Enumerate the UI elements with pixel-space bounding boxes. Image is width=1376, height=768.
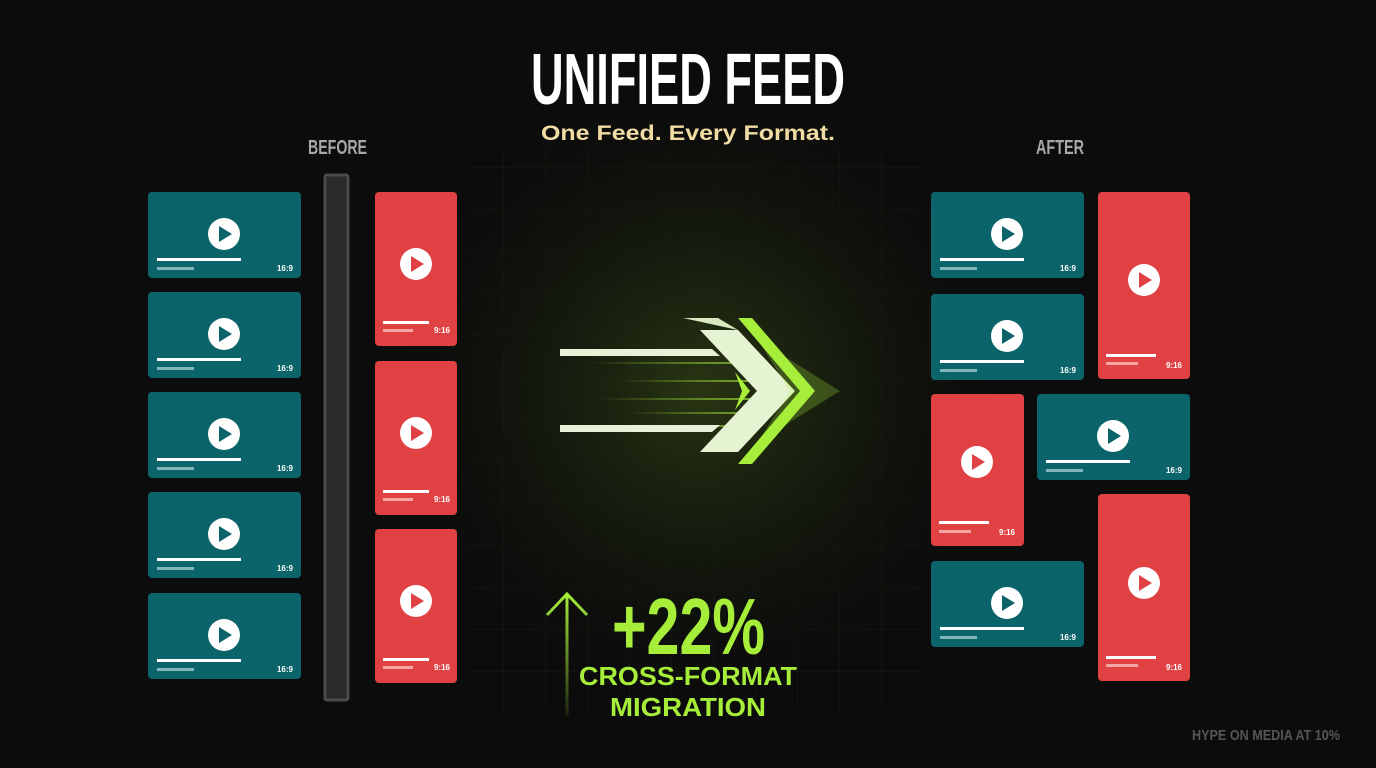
teal card A1 — [931, 192, 1084, 278]
stat: +22% cross-format migration: CROSS-FORMAT — [579, 661, 797, 691]
teal card 5: 16:9 — [277, 665, 294, 674]
arrow: transformation chevrons — [560, 318, 840, 464]
stat: +22% cross-format migration: +22% — [612, 582, 765, 671]
teal card 4 — [148, 492, 301, 578]
teal card A3: 16:9 — [1166, 466, 1183, 475]
red card A3: 9:16 — [1166, 663, 1183, 672]
stat: +22% cross-format migration: MIGRATION — [610, 692, 766, 722]
teal card A2 — [931, 294, 1084, 380]
label: after: AFTER — [1036, 137, 1084, 159]
red card A3 — [1098, 494, 1190, 681]
teal card 3: 16:9 — [277, 464, 294, 473]
teal card 1: 16:9 — [277, 264, 294, 273]
red card 3 — [375, 529, 457, 683]
red card A2: 9:16 — [999, 528, 1016, 537]
teal card A1: 16:9 — [1060, 264, 1077, 273]
red card 1: 9:16 — [434, 326, 451, 335]
red card 2: 9:16 — [434, 495, 451, 504]
red card A1: 9:16 — [1166, 361, 1183, 370]
stat: +22% cross-format migration — [547, 582, 797, 722]
red card 3: 9:16 — [434, 663, 451, 672]
teal card A2: 16:9 — [1060, 366, 1077, 375]
teal card 2: 16:9 — [277, 364, 294, 373]
red card 1 — [375, 192, 457, 346]
red card A2 — [931, 394, 1024, 546]
footer credit: HYPE ON MEDIA AT 10% — [1192, 727, 1340, 744]
teal card A4: 16:9 — [1060, 633, 1077, 642]
panel: after feed — [931, 192, 1190, 681]
teal card 2 — [148, 292, 301, 378]
teal card 4: 16:9 — [277, 564, 294, 573]
teal card 5 — [148, 593, 301, 679]
panel: before feed — [148, 175, 457, 700]
red card A1 — [1098, 192, 1190, 379]
divider wall — [325, 175, 348, 700]
teal card 3 — [148, 392, 301, 478]
teal card A4 — [931, 561, 1084, 647]
subtitle: One Feed. Every Format. — [541, 122, 835, 145]
teal card A3 — [1037, 394, 1190, 480]
icon: up arrow — [547, 594, 587, 716]
red card 2 — [375, 361, 457, 515]
label: before: BEFORE — [308, 137, 367, 159]
teal card 1 — [148, 192, 301, 278]
title: UNIFIED FEED — [531, 40, 845, 120]
